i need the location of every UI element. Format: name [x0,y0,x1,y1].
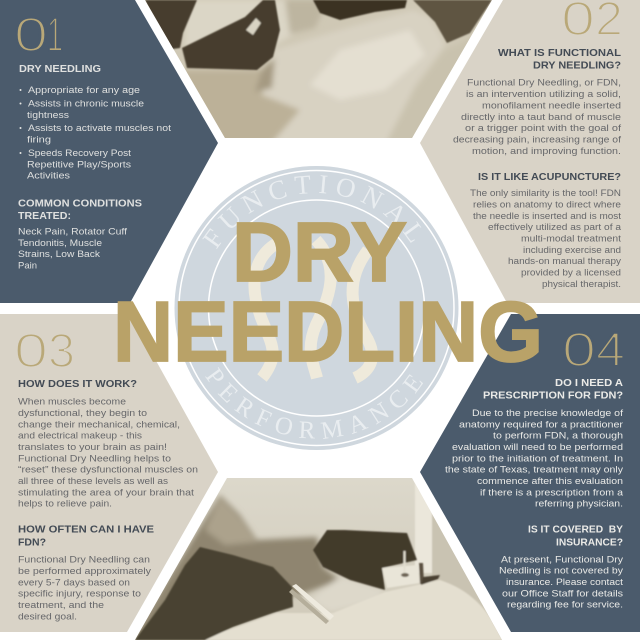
number 01: 1 [47,9,63,62]
number 04: 0 [562,324,596,377]
text: conditions list: Strains, Low Back [18,249,100,260]
number 04: 4 [596,324,625,377]
text: insurance answer: insurance. Please contact [506,577,623,588]
text: acupuncture answer: including exercise and [523,245,621,256]
text: how it works: When muscles become [18,397,126,408]
bullet list: Activities [27,170,70,182]
text: acupuncture answer: provided by a licensed [521,268,621,279]
title: dry needling: DRY [232,205,407,299]
text: how it works: helps to relieve pain. [18,499,112,510]
text: insurance answer [499,554,623,611]
heading: common conditions treated: TREATED: [18,210,71,222]
panel 02: what is functional dry needling [420,0,640,303]
number 02 [561,0,623,46]
bullet list: Assists to activate muscles not [28,123,171,134]
logo text: performance: PERFORMANCE [205,367,423,439]
text: acupuncture answer [470,188,622,290]
heading: how often [18,524,154,548]
bullet list: firing [27,134,51,146]
text: acupuncture answer: relies on anatomy to direct where [473,200,621,211]
text: definition: monofilament needle inserted [482,101,621,112]
text: definition: is an intervention utilizing a solid, [466,89,621,100]
heading: is it covered by insurance: IS IT COVERED BY [528,524,623,536]
text: acupuncture answer: physical therapist. [542,279,621,290]
text: prescription answer: Due to the precise knowledge of [472,408,623,419]
heading: what is functional dry needling [498,47,622,72]
text: insurance answer: regarding fee for service. [507,600,623,611]
text: how often answer [18,555,151,622]
panel 01: dry needling [0,0,218,303]
heading: dry needling: DRY NEEDLING [19,63,101,75]
logo text: functional: FUNCTIONAL [202,175,422,249]
panel 04: prescription and insurance [420,314,640,632]
heading: is it like acupuncture: IS IT LIKE ACUPUNCTURE? [478,171,621,183]
text: how it works: change their mechanical, chemical, [18,419,180,430]
text: acupuncture answer: hands-on manual therapy [508,256,621,267]
text: prescription answer: evaluation will need to be performed [452,442,623,453]
text: acupuncture answer: the needle is inserted and is most [473,211,621,222]
title: dry needling [113,205,543,380]
number 04 [562,324,625,377]
text: how often answer: be performed approximately [18,566,151,577]
text: how it works: dysfunctional, they begin to [18,408,147,419]
text: definition: or a trigger point with the goal of [465,123,621,134]
photo: needling on the arm, top hexagon [140,0,500,145]
text: acupuncture answer: multi-modal treatment [521,234,621,245]
number 03: 0 [14,325,48,378]
text: definition: motion, and improving function. [472,146,621,157]
text: how it works: “reset” these dysfunctional muscles on [18,465,198,476]
heading: how does it work: HOW DOES IT WORK? [18,378,137,390]
heading: common conditions treated: COMMON CONDITIONS [18,198,142,210]
text: how often answer: Functional Dry Needling can [18,555,150,566]
bullet list: Repetitive Play/Sports [27,160,131,170]
text: prescription answer: referring physician. [535,499,623,510]
text: how often answer: desired goal. [18,611,77,622]
text: conditions list: Neck Pain, Rotator Cuff [18,226,127,238]
photo: needling with gloved hands, bottom hexagon [130,478,510,640]
number 01 [14,9,63,62]
text: definition: decreasing pain, increasing range of [453,135,621,146]
text: prescription answer: if there is a prescription from a [480,487,624,498]
bullet list: Speeds Recovery Post [28,148,131,159]
text: how it works: Functional Dry Needling helps to [18,453,171,464]
text: how it works: all three of these levels as well as [18,476,168,487]
text: how often answer: specific injury, response to [18,589,141,600]
text: how it works: stimulating the area of your brain that [18,487,194,498]
number 01: 0 [14,9,48,62]
text: how it works: translates to your brain as pain! [18,442,167,453]
bullet list: tightness [27,110,69,121]
text: prescription answer: the state of Texas, treatment may only [445,465,623,476]
heading: do I need a prescription [483,377,623,402]
bullet list [20,85,171,182]
text: prescription answer: prior to the initiation of treatment. In [452,453,623,464]
text: how it works: and electrical makeup - this [18,431,142,442]
text: insurance answer: Needling is not covered by [499,566,623,577]
logo mark: cream S curves [254,240,372,378]
text: conditions list [18,226,127,272]
text: prescription answer: to perform FDN, a thorough [493,431,623,442]
text: acupuncture answer: The only similarity is the tool! FDN [470,188,621,199]
bullet list: Appropriate for any age [28,85,140,96]
heading: how often: HOW OFTEN CAN I HAVE [18,524,154,536]
heading: do I need a prescription: PRESCRIPTION FOR FDN? [483,390,623,402]
heading: is it covered by insurance: INSURANCE? [556,536,623,548]
heading: what is functional dry needling: WHAT IS FUNCTIONAL [498,47,622,59]
heading: what is functional dry needling: DRY NEEDLING? [533,60,621,72]
text: definition: Functional Dry Needling, or FDN, [467,78,621,89]
text: prescription answer: commence after this evaluation [477,476,623,487]
number 03: 3 [48,325,75,378]
text: how it works [18,397,198,510]
text: prescription answer [445,408,624,510]
title: dry needling: NEEDLING [113,285,543,380]
text: insurance answer: our Office Staff for details [502,588,623,599]
text: how often answer: every 5-7 days based on [18,577,130,588]
text: definition [453,78,621,157]
text: how often answer: treatment, and the [18,600,104,611]
logo: functional performance seal [174,166,458,450]
text: insurance answer: At present, Functional Dry [501,554,623,565]
text: conditions list: Tendonitis, Muscle [18,238,102,249]
bullet list: Assists in chronic muscle [28,98,144,110]
heading: is it covered by insurance [528,524,623,548]
text: acupuncture answer: effectively utilized as part of a [488,222,622,233]
heading: do I need a prescription: DO I NEED A [555,377,623,389]
panel 03: how does it work [0,314,218,632]
heading: common conditions treated [18,198,142,222]
text: definition: directly into a taut band of muscle [461,112,621,123]
text: prescription answer: anatomy required for a practitioner [459,419,624,430]
number 03 [14,325,75,378]
text: conditions list: Pain [18,260,37,272]
heading: how often: FDN? [18,536,46,548]
